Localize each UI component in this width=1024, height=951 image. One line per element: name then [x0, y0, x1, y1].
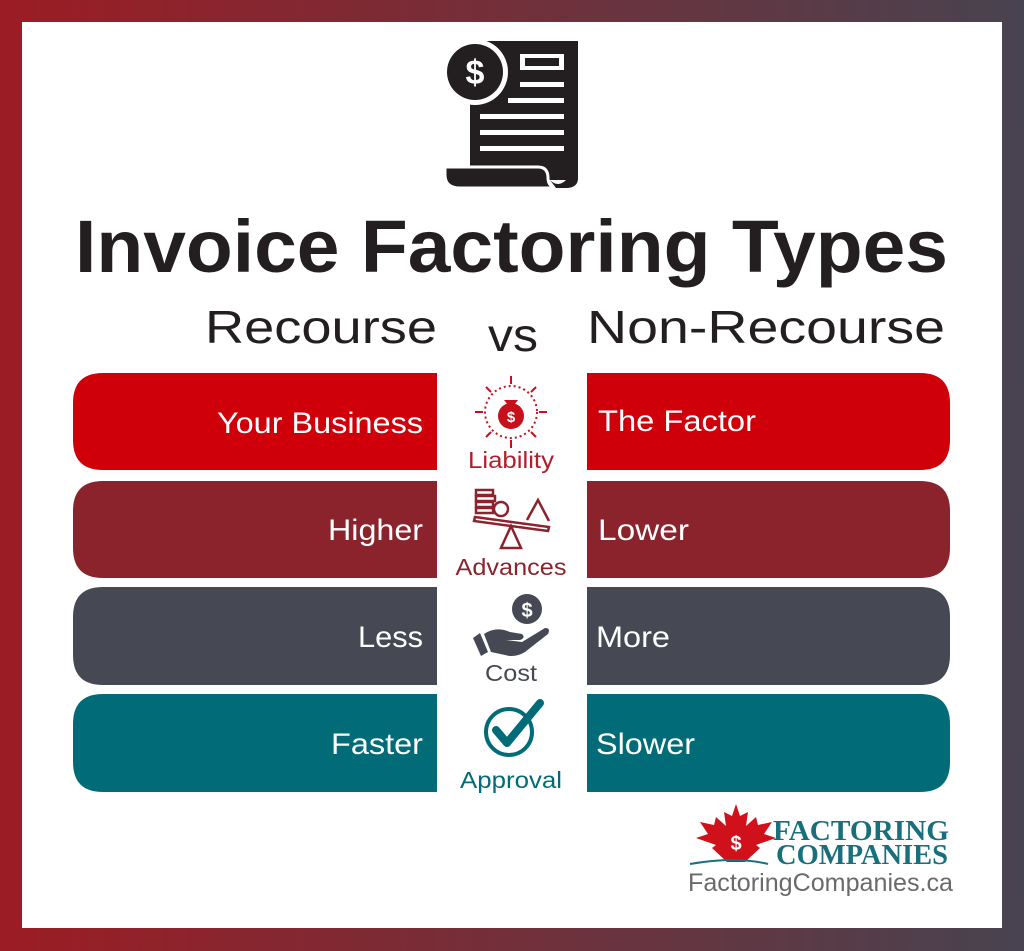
- row: liability: The Factor: [598, 405, 756, 438]
- row: advances: Advances: [456, 554, 566, 580]
- icon: hand with coin: [473, 594, 549, 656]
- row: liability: Your Business: [217, 407, 423, 440]
- icon: invoice document: $: [466, 54, 485, 92]
- icon: check mark circle: [486, 703, 540, 755]
- row: advances: Higher: [328, 514, 423, 547]
- row: approval: Slower: [596, 728, 695, 761]
- icon: hand with coin: $: [521, 600, 533, 622]
- logo: factoring companies: FactoringCompanies.ca: [688, 869, 953, 897]
- row: cost: Less: [358, 621, 423, 654]
- row: cost: [73, 587, 950, 686]
- logo: factoring companies: [688, 804, 953, 897]
- icon: money bag with arrows: $: [507, 409, 516, 426]
- row: approval: [73, 694, 950, 793]
- row: cost: Cost: [485, 660, 538, 686]
- logo: factoring companies: COMPANIES: [776, 840, 948, 871]
- icon: scale with coins and warning: [474, 490, 549, 548]
- subtitle: vs: vs: [488, 309, 538, 361]
- title: Invoice Factoring Types: [75, 205, 948, 288]
- row: approval: Faster: [331, 728, 423, 761]
- row: liability: [73, 373, 950, 473]
- row: advances: [73, 481, 950, 580]
- logo: factoring companies: FACTORING: [773, 816, 949, 847]
- icon: invoice document: [442, 39, 578, 188]
- subtitle: Non-Recourse: Non-Recourse: [587, 301, 945, 353]
- row: liability: Liability: [468, 447, 555, 473]
- subtitle: Recourse: Recourse: [205, 301, 437, 353]
- logo: factoring companies: $: [730, 833, 742, 855]
- row: advances: Lower: [598, 514, 689, 547]
- icon: money bag with arrows: [475, 376, 547, 448]
- row: cost: More: [596, 621, 670, 654]
- row: approval: Approval: [460, 767, 562, 793]
